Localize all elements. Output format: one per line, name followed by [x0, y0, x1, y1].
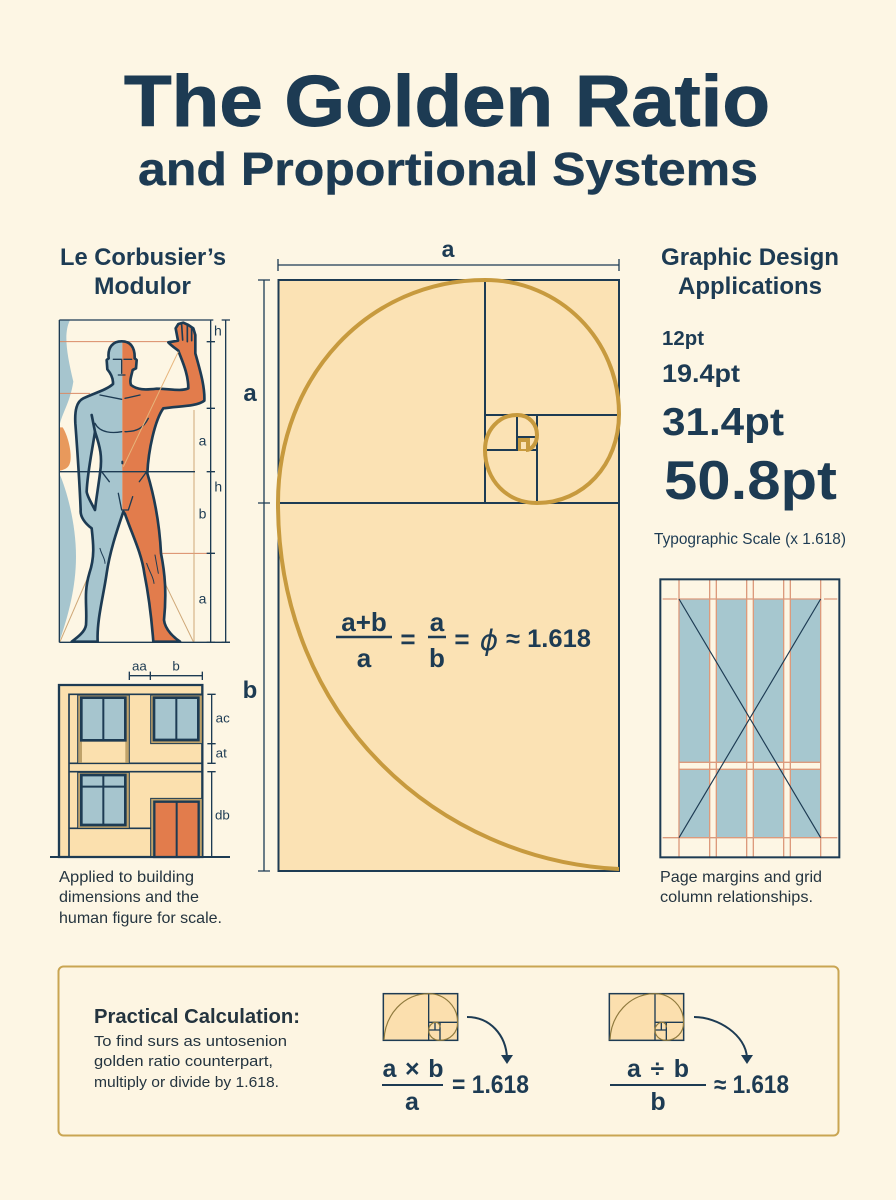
diagram: building elevation: db	[215, 807, 230, 822]
heading: Modulor: Le Corbusier’s	[60, 244, 226, 271]
infographic canvas	[50, 73, 846, 1136]
text: practical calculation: golden ratio counterpart,	[94, 1053, 273, 1070]
diagram: page grid	[660, 579, 839, 857]
formula: golden ratio: =	[400, 624, 416, 654]
title	[124, 62, 770, 195]
formula: multiply: = 1.618	[452, 1071, 529, 1099]
typographic scale	[654, 328, 846, 548]
figure: Modulor man with proportion lines: a	[199, 432, 207, 448]
arrow: multiply	[467, 1017, 513, 1064]
formula: multiply: a × b	[382, 1055, 444, 1083]
formula: multiply: a	[405, 1088, 420, 1116]
text: practical calculation: Practical Calculation:	[94, 1006, 300, 1028]
heading: Graphic Design: Applications	[678, 273, 822, 300]
panel: Graphic Design Applications	[654, 244, 846, 906]
diagram: building elevation	[50, 659, 230, 857]
formula: multiply	[382, 1055, 529, 1116]
figure: Modulor man with proportion lines: b	[199, 506, 207, 522]
formula: divide	[610, 1055, 789, 1116]
figure: Modulor man with proportion lines	[59, 320, 230, 642]
heading: Modulor: Modulor	[94, 273, 191, 300]
title: and Proportional Systems	[138, 143, 758, 195]
caption: page grid: Page margins and grid	[660, 869, 822, 886]
typographic scale: 31.4pt	[662, 401, 784, 444]
caption: building and figure: dimensions and the	[59, 889, 199, 906]
formula: golden ratio: a+b	[341, 607, 387, 637]
panel: golden rectangle with spiral	[243, 236, 619, 871]
typographic scale: 12pt	[662, 328, 704, 350]
icon: mini golden rectangle	[383, 994, 458, 1040]
formula: divide: a ÷ b	[627, 1055, 689, 1083]
title: The Golden Ratio	[124, 62, 770, 142]
golden rectangle subdivisions	[278, 280, 619, 871]
text: practical calculation	[94, 1006, 300, 1091]
caption: building and figure	[59, 869, 222, 927]
figure: Modulor man with proportion lines: a	[199, 590, 207, 606]
formula: golden ratio: =	[454, 624, 470, 654]
icon: mini golden rectangle	[609, 994, 684, 1040]
dimension: left a and b: b	[243, 677, 257, 704]
caption: page grid	[660, 869, 822, 906]
heading: Graphic Design	[661, 244, 839, 300]
typographic scale: 19.4pt	[662, 360, 741, 388]
caption: page grid: column relationships.	[660, 889, 813, 906]
figure: Modulor man with proportion lines: h	[214, 479, 222, 495]
typographic scale: 50.8pt	[664, 449, 837, 511]
dimension: left a and b	[243, 280, 270, 871]
formula: golden ratio: a	[357, 643, 372, 673]
golden spiral	[278, 280, 619, 869]
diagram: building elevation: b	[172, 659, 180, 674]
panel: Le Corbusier's Modulor	[50, 244, 230, 927]
formula: golden ratio	[336, 607, 591, 673]
heading: Modulor	[60, 244, 226, 300]
example: multiply	[382, 994, 529, 1116]
figure: Modulor man with proportion lines: h	[214, 322, 222, 338]
formula: golden ratio: b	[429, 643, 445, 673]
text: practical calculation: To find surs as untosenion	[94, 1033, 287, 1050]
body: outline and details	[72, 323, 204, 642]
diagram: building elevation: at	[216, 746, 227, 761]
formula: divide: ≈ 1.618	[714, 1071, 789, 1099]
heading: Graphic Design: Graphic Design	[661, 244, 839, 271]
formula: divide: b	[650, 1088, 666, 1116]
dimension: top a	[278, 236, 619, 271]
body: blue half	[76, 342, 122, 640]
dimension: top a: a	[442, 236, 455, 262]
diagram: building elevation: ac	[216, 710, 230, 725]
dimension: left a and b: a	[243, 380, 257, 407]
caption: building and figure: human figure for scale.	[59, 910, 222, 927]
typographic scale: Typographic Scale (x 1.618)	[654, 531, 846, 548]
panel: practical calculation	[58, 966, 838, 1136]
example: divide	[609, 994, 789, 1116]
formula: golden ratio: a	[430, 607, 445, 637]
formula: golden ratio: ≈ 1.618	[506, 625, 591, 653]
text: practical calculation: multiply or divide by 1.618.	[94, 1074, 279, 1091]
formula: golden ratio: ϕ	[480, 624, 498, 657]
measurement lines	[59, 320, 230, 642]
diagram: building elevation: aa	[132, 659, 147, 674]
arrow: divide	[694, 1017, 753, 1064]
body: orange half	[122, 324, 204, 640]
caption: building and figure: Applied to building	[59, 869, 194, 886]
